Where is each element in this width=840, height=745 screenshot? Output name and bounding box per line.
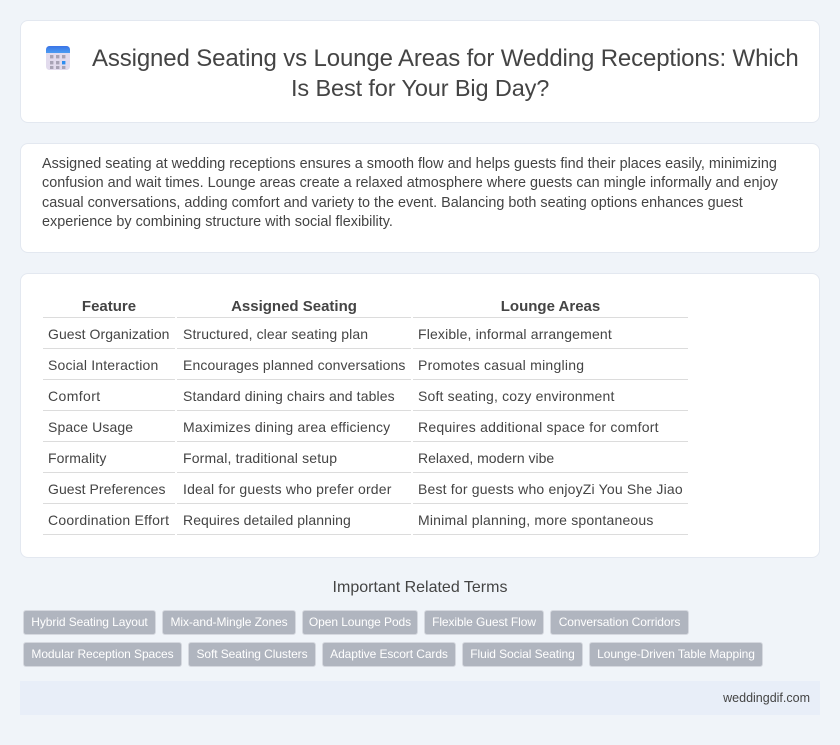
- comparison table: Ideal for guests who prefer order: [183, 481, 392, 497]
- related terms tags: Soft Seating Clusters: [196, 647, 308, 661]
- comparison table: Formality: [48, 450, 106, 466]
- intro text: confusion and wait times. Lounge areas create a relaxed atmosphere where guests can mingle informally and enjoy: [42, 175, 778, 191]
- related terms tags: Hybrid Seating Layout: [31, 615, 148, 629]
- comparison table: Standard dining chairs and tables: [183, 388, 395, 404]
- related terms tags: Open Lounge Pods: [309, 615, 411, 629]
- intro text: Assigned seating at wedding receptions ensures a smooth flow and helps guests find their places easily, minimizing: [42, 156, 777, 172]
- table panel: [20, 273, 820, 558]
- related terms tags: Conversation Corridors: [559, 615, 680, 629]
- comparison table: Best for guests who enjoyZi You She Jiao: [418, 481, 683, 497]
- heading: Assigned Seating vs Lounge Areas for Wedding Receptions: Which: [92, 45, 799, 72]
- comparison table: Lounge Areas: [501, 298, 600, 315]
- title panel: [20, 20, 820, 123]
- icon: calendar: [46, 46, 70, 70]
- comparison table: Space Usage: [48, 419, 133, 435]
- related terms tags: Mix-and-Mingle Zones: [170, 615, 288, 629]
- related terms tags: Modular Reception Spaces: [31, 647, 174, 661]
- intro text: casual conversations, adding comfort and variety to the event. Balancing both seating options enhances guest: [42, 194, 743, 210]
- comparison table: Minimal planning, more spontaneous: [418, 512, 654, 528]
- comparison table: Feature: [82, 298, 136, 315]
- related terms heading: Important Related Terms: [333, 579, 507, 596]
- comparison table: Requires additional space for comfort: [418, 419, 659, 435]
- intro panel: [20, 143, 820, 253]
- footer source: weddingdif.com: [723, 691, 810, 705]
- related terms tags: [23, 610, 763, 667]
- comparison table: Coordination Effort: [48, 512, 169, 528]
- comparison table: Comfort: [48, 388, 101, 404]
- comparison table: Assigned Seating: [231, 298, 357, 315]
- comparison table: Promotes casual mingling: [418, 357, 584, 373]
- comparison table: Flexible, informal arrangement: [418, 326, 612, 342]
- intro text: [42, 156, 778, 230]
- intro text: experience by combining structure with social flexibility.: [42, 214, 393, 230]
- heading: [92, 45, 799, 101]
- related terms tags: Lounge-Driven Table Mapping: [597, 647, 755, 661]
- comparison table: Formal, traditional setup: [183, 450, 337, 466]
- footer bar: [20, 681, 820, 715]
- comparison table: Requires detailed planning: [183, 512, 351, 528]
- comparison table: Relaxed, modern vibe: [418, 450, 554, 466]
- comparison table: Soft seating, cozy environment: [418, 388, 615, 404]
- comparison table: Guest Organization: [48, 326, 170, 342]
- comparison table: Guest Preferences: [48, 481, 166, 497]
- comparison table: [43, 298, 688, 535]
- comparison table: Structured, clear seating plan: [183, 326, 368, 342]
- comparison table: Encourages planned conversations: [183, 357, 406, 373]
- comparison table: Social Interaction: [48, 357, 158, 373]
- related terms tags: Adaptive Escort Cards: [330, 647, 448, 661]
- related terms tags: Flexible Guest Flow: [432, 615, 536, 629]
- heading: Is Best for Your Big Day?: [291, 75, 549, 101]
- related terms tags: Fluid Social Seating: [470, 647, 575, 661]
- comparison table: Maximizes dining area efficiency: [183, 419, 390, 435]
